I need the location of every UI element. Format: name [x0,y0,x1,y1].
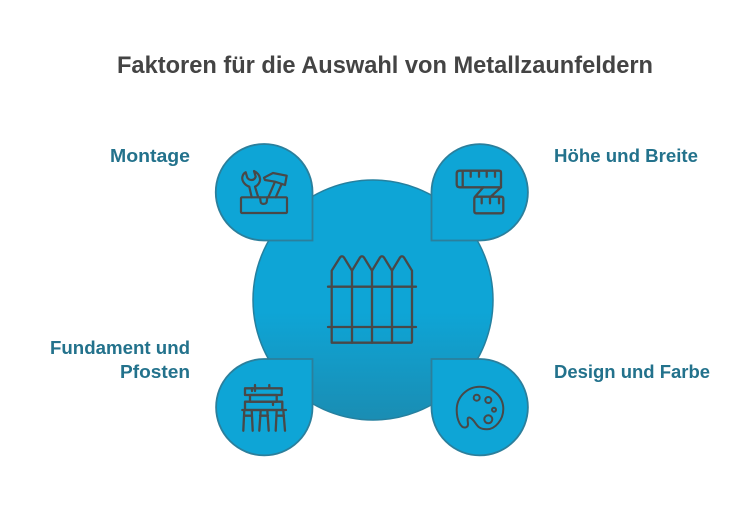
petal: Montage [216,144,312,240]
label: Fundament und Pfosten: Pfosten [120,362,190,382]
label: Fundament und Pfosten: Fundament und [50,338,190,358]
label: Höhe und Breite: Höhe und Breite [554,146,698,166]
label: Design und Farbe: Design und Farbe [554,362,710,382]
icon: measuring tape [457,171,503,213]
icon: fence [328,256,416,343]
icon: palette [457,387,503,429]
central circle [253,180,493,420]
icon: tools [241,171,287,213]
petal: Design und Farbe [432,359,528,455]
label: Fundament und Pfosten [50,338,190,382]
icon: foundation and posts [242,385,286,431]
petal: Fundament und Pfosten [216,359,312,455]
title: Faktoren für die Auswahl von Metallzaunfeldern [117,52,653,79]
petal: Höhe und Breite [432,144,528,240]
label: Montage: Montage [110,146,190,166]
